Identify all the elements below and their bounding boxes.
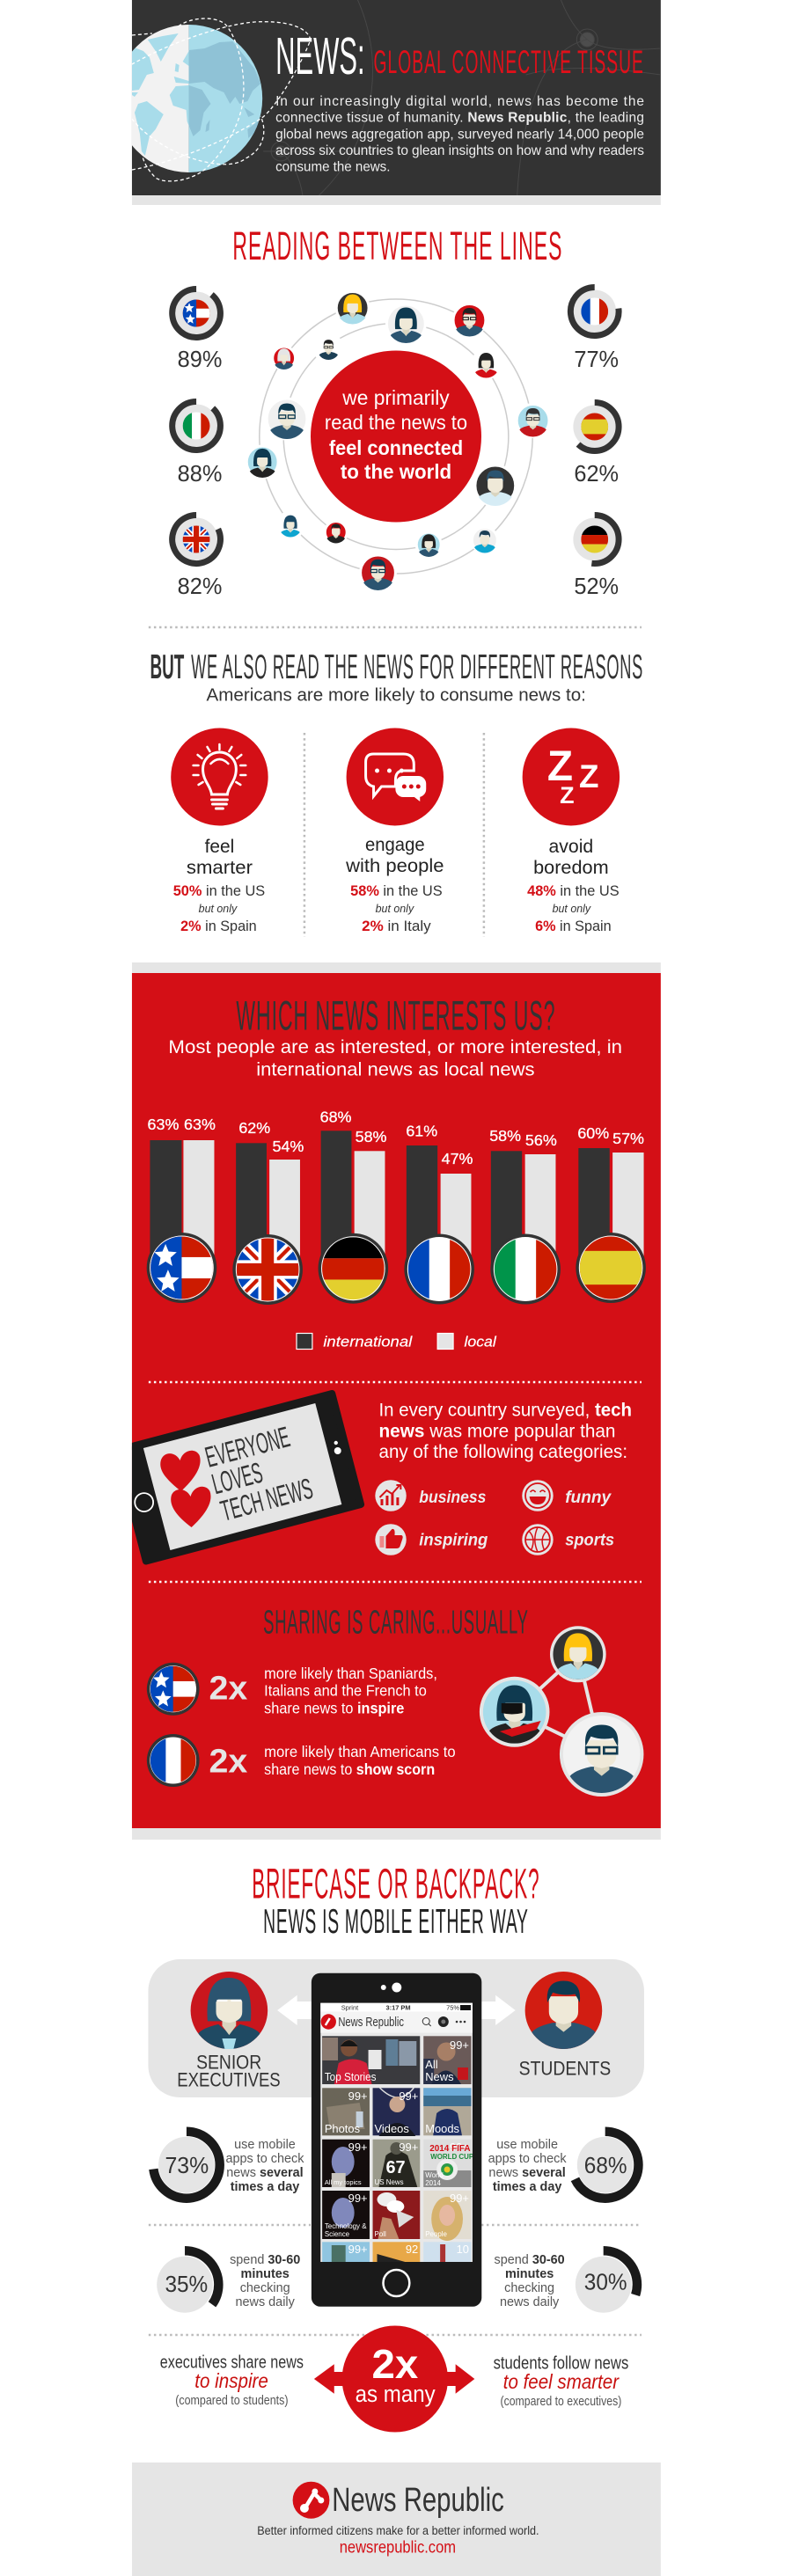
stat: students 68%: apps to check bbox=[488, 2152, 567, 2166]
tile labels: All my topics bbox=[325, 2178, 362, 2186]
tile labels: World bbox=[425, 2171, 444, 2179]
text: tech news: news was more popular than bbox=[378, 1422, 616, 1442]
panel: audience band bbox=[148, 1959, 644, 2097]
subheading: international news as local news bbox=[256, 1060, 535, 1080]
stat: executives 35%: checking bbox=[240, 2281, 290, 2295]
stat: executives 35%: 35% bbox=[165, 2272, 208, 2297]
stat: usa 2x bbox=[147, 1663, 437, 1717]
text: tech news: In every country surveyed, tech bbox=[378, 1401, 632, 1421]
tile labels: WORLD CUP bbox=[430, 2153, 474, 2161]
label: engage with people: 2% in Italy bbox=[362, 918, 431, 934]
callout: primary reason: feel connected bbox=[329, 436, 463, 459]
category: business bbox=[375, 1480, 486, 1511]
text: students follow bbox=[494, 2353, 628, 2409]
phone status bar: 3:17 PM bbox=[385, 2003, 411, 2012]
text: executives share: (compared to students) bbox=[175, 2394, 289, 2408]
category: funny bbox=[522, 1480, 612, 1511]
tile labels: 99+ bbox=[348, 2192, 368, 2205]
bar value labels: 57% bbox=[612, 1130, 644, 1147]
tile labels: 99+ bbox=[348, 2141, 368, 2154]
chart: country rings left: 82% bbox=[178, 574, 222, 599]
icon: chat bubbles bbox=[366, 754, 426, 801]
panel: which news interests us bbox=[117, 973, 661, 1828]
category: funny: funny bbox=[565, 1489, 612, 1507]
arrow: left bbox=[277, 1995, 316, 2025]
heading: but we also read: BUT bbox=[150, 648, 184, 686]
tile labels: 67 bbox=[385, 2158, 406, 2177]
chart: country rings right bbox=[568, 284, 621, 599]
intro text: consume the news. bbox=[275, 160, 390, 175]
diagram: people orbit bbox=[246, 292, 549, 590]
icon: sleeping zzz bbox=[547, 743, 599, 809]
chart: country rings left: 89% bbox=[178, 348, 222, 372]
stat: students 68%: use mobile bbox=[496, 2138, 558, 2152]
logo: news republic: News Republic bbox=[332, 2482, 504, 2519]
label: avoid boredom: avoid bbox=[549, 837, 593, 857]
legend: local bbox=[464, 1334, 497, 1350]
panel: header bbox=[132, 0, 661, 205]
chart: country rings right: 52% bbox=[574, 574, 619, 599]
text: executives share: executives share news bbox=[160, 2353, 304, 2373]
tile labels: 92 bbox=[406, 2243, 418, 2256]
title: NEWS: bbox=[275, 28, 365, 85]
icon: sleeping zzz: Z bbox=[547, 743, 573, 790]
label: engage with people bbox=[345, 835, 444, 934]
stat: students 68% bbox=[488, 2132, 638, 2199]
bar value labels: 58% bbox=[356, 1128, 386, 1145]
category: inspiring bbox=[375, 1524, 488, 1555]
chart: country rings right: 62% bbox=[574, 462, 619, 487]
callout: primary reason: we primarily bbox=[341, 386, 450, 409]
app tile grid bbox=[322, 2036, 474, 2262]
icon: tablet everyone loves tech news bbox=[117, 1394, 361, 1561]
callout: primary reason: to the world bbox=[341, 460, 451, 483]
phone mockup bbox=[312, 1973, 481, 2307]
stat: students 30%: spend 30-60 bbox=[495, 2253, 565, 2267]
label: feel smarter: 50% in the US bbox=[173, 882, 265, 899]
bar value labels: 58% bbox=[489, 1127, 521, 1145]
legend: international bbox=[323, 1334, 414, 1350]
stat: france 2x: more likely than Americans to bbox=[264, 1743, 456, 1760]
bar value labels: 56% bbox=[525, 1131, 557, 1149]
tile labels: Top Stories bbox=[325, 2070, 377, 2083]
tile labels: Technology & bbox=[325, 2222, 367, 2230]
stat: usa 2x: share news to inspire bbox=[264, 1699, 404, 1717]
app header: News Republic bbox=[338, 2015, 404, 2030]
intro text: In our increasingly digital world, news has become the bbox=[275, 94, 644, 109]
website: newsrepublic.com bbox=[340, 2539, 456, 2558]
text: executives share bbox=[160, 2353, 304, 2408]
tile labels: Poll bbox=[375, 2230, 386, 2238]
subheading: Most people are as interested, or more interested, in bbox=[168, 1037, 622, 1057]
column: feel smarter bbox=[171, 728, 268, 934]
stat: usa 2x: Italians and the French to bbox=[264, 1682, 427, 1700]
label: engage with people: 58% in the US bbox=[350, 882, 443, 899]
icon: light bulb bbox=[194, 744, 246, 809]
stat: france 2x: share news to show scorn bbox=[264, 1760, 435, 1778]
app header bbox=[320, 2012, 473, 2033]
tile labels: Science bbox=[325, 2230, 350, 2238]
bar value labels: 62% bbox=[238, 1119, 270, 1137]
stat: executives 73%: times a day bbox=[231, 2180, 299, 2194]
page content bbox=[132, 0, 661, 2576]
stat: students 30%: news daily bbox=[500, 2295, 560, 2309]
stat: students 30%: checking bbox=[504, 2281, 554, 2295]
category: sports bbox=[522, 1524, 614, 1555]
stat: usa 2x: more likely than Spaniards, bbox=[264, 1665, 437, 1682]
intro text: across six countries to glean insights on how and why readers bbox=[275, 143, 644, 158]
text: executives share: to inspire bbox=[194, 2369, 268, 2392]
arrow: right bbox=[478, 1995, 516, 2025]
label: senior executives bbox=[177, 2052, 281, 2091]
stat: students 68%: times a day bbox=[493, 2180, 561, 2194]
bar value labels: 63% bbox=[148, 1116, 179, 1133]
stat: executives 35%: news daily bbox=[236, 2295, 296, 2309]
bar value labels bbox=[148, 1109, 644, 1167]
avatar: senior executive bbox=[191, 1972, 268, 2049]
footer bbox=[132, 2463, 661, 2576]
icon: tablet everyone loves tech news: EVERYONE bbox=[202, 1420, 293, 1474]
column: avoid boredom bbox=[523, 728, 620, 934]
label: feel smarter: but only bbox=[199, 903, 238, 915]
label: avoid boredom: 6% in Spain bbox=[535, 918, 612, 934]
text: students follow: students follow news bbox=[494, 2353, 628, 2373]
chart: country rings left bbox=[162, 279, 231, 599]
tile labels: 99+ bbox=[450, 2192, 469, 2205]
tile labels: 99+ bbox=[450, 2141, 469, 2154]
bar value labels: 61% bbox=[406, 1123, 437, 1140]
tile labels: News bbox=[425, 2070, 454, 2083]
label: avoid boredom: but only bbox=[553, 903, 591, 915]
intro text: connective tissue of humanity. News Republic, the leading bbox=[275, 111, 644, 126]
column: engage with people bbox=[345, 728, 444, 934]
text: tech news: any of the following categories: bbox=[378, 1442, 627, 1462]
icon: sleeping zzz: Z bbox=[560, 782, 575, 809]
heading: sharing is caring: SHARING IS CARING...USUALLY bbox=[263, 1605, 529, 1642]
callout: primary reason: read the news to bbox=[325, 411, 467, 434]
bar value labels: 54% bbox=[273, 1138, 304, 1155]
callout: 2x as many: 2x bbox=[372, 2341, 419, 2387]
icon: tablet everyone loves tech news: TECH NEWS bbox=[217, 1472, 316, 1527]
bar value labels: 60% bbox=[577, 1124, 609, 1142]
legend bbox=[297, 1334, 497, 1350]
subheading: Americans are more likely to consume news to: bbox=[207, 686, 586, 706]
intro text: global news aggregation app, surveyed nearly 14,000 people bbox=[275, 127, 644, 142]
tile labels: 99+ bbox=[348, 2089, 368, 2103]
label: engage with people: with people bbox=[345, 856, 444, 876]
icon: tablet everyone loves tech news: LOVES bbox=[209, 1456, 266, 1500]
bar value labels: 63% bbox=[184, 1116, 216, 1133]
stat: executives 73%: use mobile bbox=[234, 2138, 296, 2152]
callout: 2x as many: as many bbox=[356, 2382, 436, 2407]
stat: executives 73%: news several bbox=[226, 2166, 304, 2180]
text: students follow: to feel smarter bbox=[503, 2370, 620, 2393]
label: avoid boredom bbox=[527, 837, 620, 934]
stat: france 2x: 2x bbox=[209, 1743, 247, 1780]
tile labels: 99+ bbox=[399, 2089, 418, 2103]
label: feel smarter: smarter bbox=[187, 858, 253, 878]
phone status bar: Sprint bbox=[341, 2003, 359, 2012]
category: sports: sports bbox=[565, 1532, 614, 1550]
tile labels: People bbox=[425, 2230, 448, 2238]
avatar: student bbox=[525, 1972, 602, 2049]
heading: briefcase or backpack: NEWS IS MOBILE EITHER WAY bbox=[263, 1903, 529, 1941]
tile labels: 2014 FIFA bbox=[429, 2144, 471, 2154]
stat: usa 2x: 2x bbox=[209, 1671, 247, 1708]
tile labels: Photos bbox=[325, 2122, 361, 2135]
label: feel smarter bbox=[173, 837, 265, 934]
heading: briefcase or backpack bbox=[252, 1862, 540, 1941]
bar value labels: 47% bbox=[442, 1150, 473, 1167]
label: engage with people: engage bbox=[365, 835, 425, 855]
stat: executives 73%: 73% bbox=[165, 2154, 209, 2178]
tile labels bbox=[325, 2038, 474, 2256]
tile labels: 99+ bbox=[348, 2243, 368, 2256]
chart: country rings left: 88% bbox=[178, 462, 222, 487]
stat: executives 73% bbox=[153, 2132, 304, 2199]
bar value labels: 68% bbox=[320, 1109, 352, 1126]
label: engage with people: but only bbox=[376, 903, 414, 915]
label: senior executives: EXECUTIVES bbox=[177, 2069, 281, 2091]
tile labels: All bbox=[425, 2058, 438, 2071]
stat: executives 73%: apps to check bbox=[225, 2152, 304, 2166]
stat: students 30%: minutes bbox=[505, 2267, 554, 2281]
text: tech news bbox=[378, 1401, 632, 1462]
tile labels: 99+ bbox=[450, 2038, 469, 2052]
label: senior executives: SENIOR bbox=[196, 2052, 261, 2074]
chart: country rings right: 77% bbox=[574, 348, 619, 372]
label: avoid boredom: 48% in the US bbox=[527, 882, 620, 899]
tile labels: 10 bbox=[457, 2243, 469, 2256]
label: avoid boredom: boredom bbox=[533, 858, 609, 878]
diagram: sharing network bbox=[480, 1626, 643, 1797]
label: feel smarter: 2% in Spain bbox=[180, 918, 257, 934]
stat: executives 35%: minutes bbox=[241, 2267, 290, 2281]
label: students: STUDENTS bbox=[519, 2058, 611, 2080]
icon: globe bbox=[132, 18, 311, 181]
icon: sleeping zzz: Z bbox=[579, 758, 599, 794]
stat: students 30%: 30% bbox=[584, 2271, 627, 2295]
stat: executives 35% bbox=[151, 2250, 300, 2318]
stat: students 68%: 68% bbox=[584, 2154, 627, 2178]
infographic canvas bbox=[132, 0, 661, 2576]
stat: students 68%: news several bbox=[488, 2166, 566, 2180]
stat: students 30% bbox=[495, 2250, 637, 2318]
title bbox=[275, 28, 644, 85]
stat: executives 35%: spend 30-60 bbox=[230, 2253, 300, 2267]
tile labels: Videos bbox=[375, 2122, 409, 2135]
label: feel smarter: feel bbox=[205, 837, 234, 857]
tile labels: US News bbox=[375, 2178, 404, 2186]
tagline: Better informed citizens make for a better informed world. bbox=[257, 2523, 539, 2537]
category: business: business bbox=[419, 1489, 486, 1507]
callout: primary reason bbox=[311, 350, 481, 523]
tile labels: Moods bbox=[425, 2122, 460, 2135]
text: students follow: (compared to executives) bbox=[500, 2395, 621, 2409]
tile labels: 99+ bbox=[399, 2141, 418, 2154]
stat: france 2x bbox=[147, 1734, 456, 1787]
logo: news republic bbox=[293, 2482, 504, 2519]
tile labels: 2014 bbox=[425, 2179, 441, 2187]
subheading bbox=[168, 1037, 622, 1080]
bar chart bbox=[147, 1109, 646, 1305]
intro text bbox=[275, 94, 644, 175]
phone status bar: 75% bbox=[446, 2003, 459, 2012]
category: inspiring: inspiring bbox=[419, 1532, 488, 1550]
phone status bar bbox=[320, 2003, 473, 2012]
callout: 2x as many bbox=[314, 2326, 474, 2432]
